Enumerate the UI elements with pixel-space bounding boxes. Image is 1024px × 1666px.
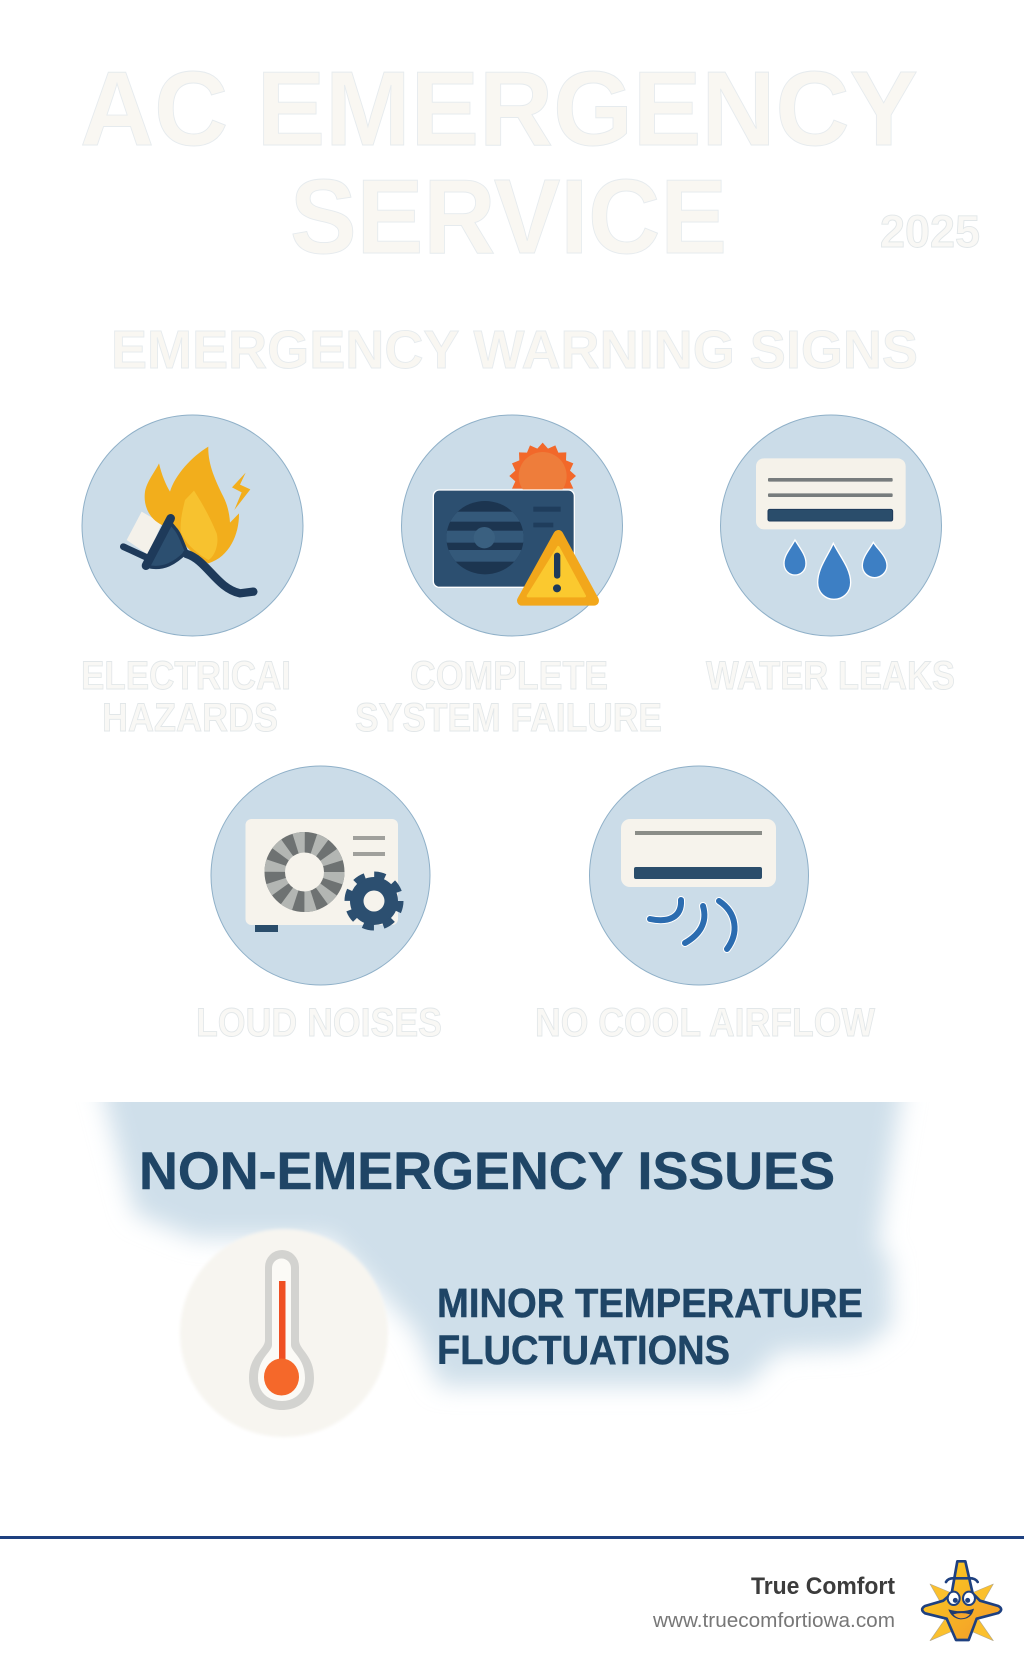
label line 2: HAZARDS [102,696,278,740]
panel: loud noises [196,766,442,1045]
icon circle [82,415,303,636]
panel: no cool airflow [535,766,875,1045]
title line 2: SERVICE [290,158,727,276]
panel: water leaks [706,415,955,698]
label: NO COOL AIRFLOW [535,1001,875,1045]
year label: 2025 [880,206,980,257]
icon: AC unit with sun and warning [433,443,594,601]
panel: non-emergency issues [98,1075,905,1437]
panel: electrical hazards [81,415,303,740]
website: www.truecomfortiowa.com [652,1610,895,1632]
panel background [98,1075,905,1386]
panel: complete system failure [355,415,662,740]
thermometer circle [180,1229,388,1437]
title line 1: AC EMERGENCY [80,50,918,168]
title [80,50,918,276]
icon circle [720,415,942,636]
label: ELECTRICAI [81,654,291,698]
section heading: emergency warning signs: EMERGENCY WARNING SIGNS [111,320,918,380]
label: COMPLETE [410,654,608,698]
icon circle [402,415,622,636]
item text line 2: FLUCTUATIONS [437,1327,730,1373]
icon: indoor unit with airflow [621,819,776,949]
icon: outdoor unit with gear [246,819,400,932]
label line 2: SYSTEM FAILURE [355,696,662,740]
icon: burning plug [123,447,253,593]
footer [0,1536,1024,1641]
label: WATER LEAKS [706,654,955,698]
icon: star mascot logo [922,1561,1001,1641]
footer rule [0,1536,1024,1539]
icon: indoor unit with water drops [756,458,906,599]
icon circle [211,766,430,985]
brand name: True Comfort [751,1573,895,1600]
icon: thermometer [249,1250,314,1410]
item text line 1: MINOR TEMPERATURE [437,1280,863,1326]
heading: NON-EMERGENCY ISSUES [139,1142,835,1201]
label: LOUD NOISES [196,1001,442,1045]
icon circle [590,766,808,985]
